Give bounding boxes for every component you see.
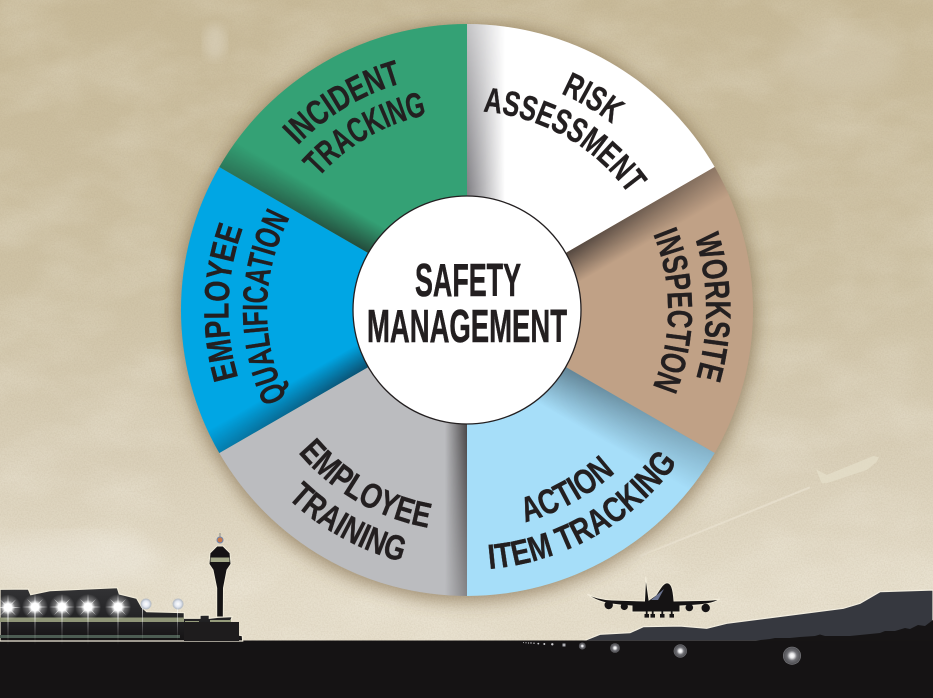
label: incident: INCIDENT — [282, 60, 397, 144]
label: item tracking: ITEM TRACKING — [488, 452, 674, 569]
runway lights — [523, 642, 801, 665]
label: action: ACTION — [524, 455, 614, 522]
panel: action item tracking — [467, 367, 715, 596]
label: inspection: INSPECTION — [653, 226, 692, 394]
airport terminal with lights — [0, 588, 243, 645]
panel: incident tracking — [219, 24, 467, 253]
center hub — [353, 196, 581, 424]
label: employee: EMPLOYEE — [204, 222, 243, 382]
label: tracking: TRACKING — [301, 92, 425, 174]
panel: worksite inspection — [566, 167, 753, 453]
panel: risk assessment — [467, 24, 715, 252]
icon: airplane taking off — [587, 577, 720, 618]
label: qualification: QUALIFICATION — [242, 208, 290, 404]
label: assessment: ASSESSMENT — [484, 88, 648, 190]
panel: employee qualification — [181, 167, 368, 453]
distant mountains — [583, 590, 933, 641]
icon: control tower — [209, 533, 231, 617]
hub title: management: MANAGEMENT — [367, 300, 567, 352]
label: worksite: WORKSITE — [696, 230, 731, 382]
hub title: safety: SAFETY — [415, 254, 521, 306]
label: employee: EMPLOYEE — [299, 438, 432, 528]
chart: safety management wheel — [168, 15, 766, 612]
label: risk: RISK — [562, 72, 626, 124]
ground — [0, 640, 933, 698]
panel: employee training — [220, 368, 467, 596]
faint distant plane and contrail — [640, 456, 879, 556]
label: training: TRAINING — [292, 480, 406, 560]
